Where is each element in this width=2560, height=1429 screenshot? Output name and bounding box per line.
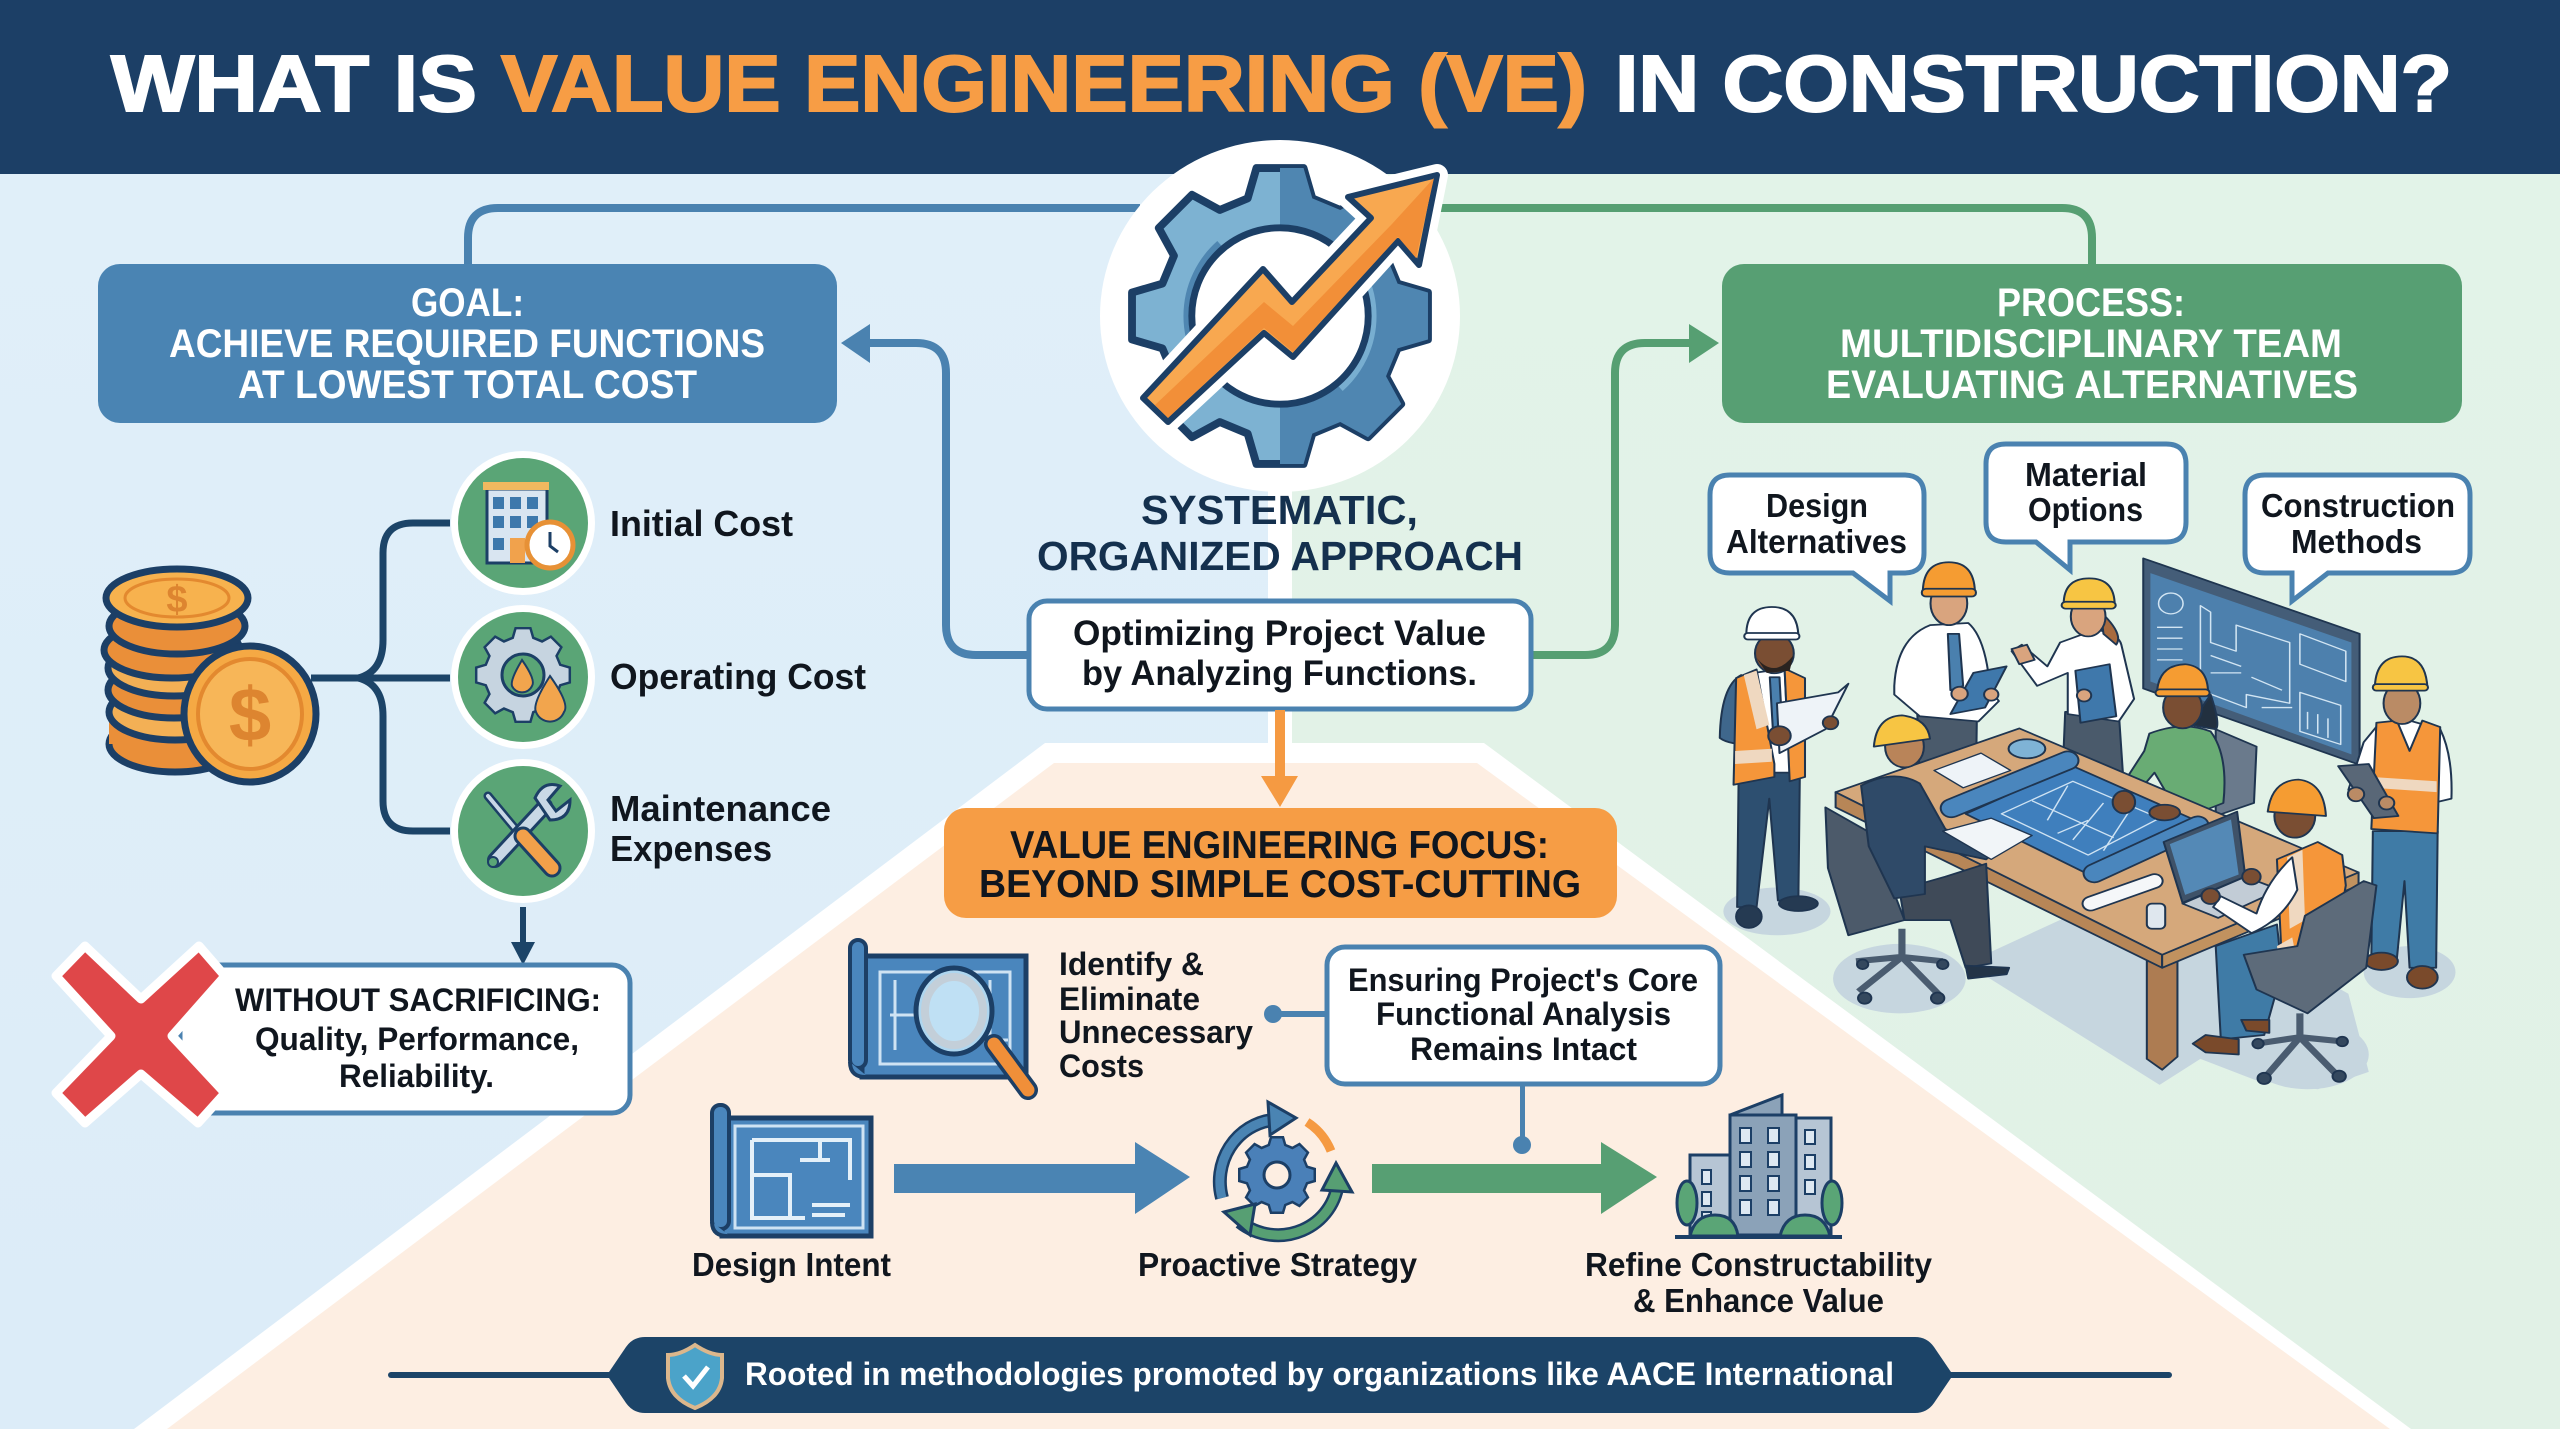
text: identify and eliminate — [1059, 946, 1253, 1084]
illustration: team meeting — [1720, 558, 2456, 1089]
process box — [1722, 264, 2462, 423]
label: refine constructability: & Enhance Value — [1633, 1282, 1884, 1319]
icon: refined building — [1675, 1095, 1842, 1237]
footer banner — [388, 1337, 2172, 1413]
icon: building with clock — [483, 482, 573, 568]
title banner: VALUE ENGINEERING (VE) — [501, 39, 1587, 128]
cost tree connectors — [311, 523, 450, 831]
background: right green panel — [1288, 174, 2560, 1429]
arrow: center to process — [1530, 324, 1719, 655]
callout: optimizing project value — [1029, 601, 1531, 709]
person: engineer with tablet — [1894, 562, 2007, 781]
label: refine constructability: Refine Constructability — [1585, 1246, 1933, 1283]
focus heading box — [944, 808, 1617, 918]
icon: red X — [56, 946, 225, 1123]
callout: core functional analysis: Remains Intact — [1410, 1031, 1637, 1067]
person: seated engineer at laptop — [2193, 780, 2376, 1084]
label: refine constructability — [1585, 1246, 1933, 1319]
hands on blueprint — [2113, 791, 2180, 820]
speech bubble: material options: Options — [2028, 491, 2143, 528]
goal box: ACHIEVE REQUIRED FUNCTIONS — [169, 322, 765, 366]
speech bubble: construction methods — [2245, 475, 2470, 601]
arrow: center to goal — [841, 324, 1030, 655]
goal box: AT LOWEST TOTAL COST — [238, 363, 697, 407]
icon: proactive strategy cycle — [1220, 1102, 1352, 1235]
title banner — [0, 0, 2560, 174]
callout: without sacrificing: WITHOUT SACRIFICING: — [235, 982, 601, 1018]
icon: coin stack — [104, 569, 316, 782]
person: woman with folder — [2012, 578, 2134, 773]
icon: gear with oil drops — [476, 628, 570, 722]
person: engineer with orange vest — [2338, 656, 2452, 989]
floor shadows — [1723, 888, 2456, 1089]
icon: blueprint with magnifier — [850, 940, 1028, 1090]
text: identify and eliminate: Costs — [1059, 1048, 1144, 1084]
white paper roll and mug — [2091, 881, 2165, 929]
text: identify and eliminate: Unnecessary — [1059, 1014, 1253, 1050]
wall screen — [2143, 558, 2360, 765]
icon: shield check — [668, 1345, 722, 1408]
laptop — [2164, 812, 2279, 918]
panel: focus trapezoid — [134, 743, 2411, 1429]
icon: coin stack: $ — [229, 673, 271, 758]
footer banner: Rooted in methodologies promoted by organizations like AACE International — [745, 1356, 1894, 1392]
goal box — [98, 264, 837, 423]
meeting table — [1836, 728, 2359, 1070]
arrow: down to without sacrificing — [511, 907, 535, 965]
connector: callout to green arrow — [1513, 1084, 1531, 1154]
callout: core functional analysis — [1327, 947, 1720, 1084]
title banner: IN CONSTRUCTION? — [1615, 39, 2452, 128]
title banner: WHAT IS — [111, 39, 477, 128]
blueprint on table — [1934, 739, 2200, 877]
text: identify and eliminate: Eliminate — [1059, 981, 1200, 1017]
connector: center to process box — [1440, 208, 2092, 264]
cost item: operating cost — [451, 605, 866, 749]
person: seated man in suit — [1825, 715, 2032, 1004]
background: left blue panel — [0, 174, 1272, 1429]
callout: without sacrificing: Reliability. — [339, 1058, 494, 1094]
person: seated woman in green — [2116, 664, 2257, 816]
speech bubble: material options: Material — [2025, 456, 2147, 493]
cost item: maintenance expenses — [451, 759, 831, 903]
callout: without sacrificing — [180, 965, 630, 1113]
heading: systematic approach: SYSTEMATIC, — [1141, 487, 1418, 533]
goal box: GOAL: — [411, 281, 524, 325]
callout: core functional analysis: Ensuring Project's Core — [1348, 962, 1698, 998]
arrow: green process arrow — [1372, 1142, 1657, 1214]
cost item: initial cost: Initial Cost — [610, 503, 793, 544]
label: design intent: Design Intent — [692, 1246, 891, 1283]
callout: core functional analysis: Functional Analysis — [1376, 996, 1671, 1032]
speech bubble: construction methods: Methods — [2291, 523, 2422, 560]
icon: wrench and screwdriver — [488, 784, 570, 868]
label: proactive strategy: Proactive Strategy — [1138, 1246, 1418, 1283]
heading: systematic approach: ORGANIZED APPROACH — [1037, 533, 1523, 579]
speech bubble: construction methods: Construction — [2261, 487, 2455, 524]
callout: without sacrificing: Quality, Performance, — [255, 1021, 579, 1057]
cost item: operating cost: Operating Cost — [610, 656, 866, 697]
focus heading box: VALUE ENGINEERING FOCUS: — [1010, 824, 1549, 867]
callout: optimizing project value: Optimizing Project Value — [1073, 614, 1486, 653]
speech bubble: design alternatives: Design — [1766, 487, 1868, 524]
callout: optimizing project value: by Analyzing Functions. — [1082, 654, 1477, 693]
process box: EVALUATING ALTERNATIVES — [1826, 363, 2358, 407]
arrow: down to focus — [1261, 710, 1298, 807]
icon: gear with rising arrow — [1100, 140, 1460, 492]
speech bubble: design alternatives: Alternatives — [1726, 523, 1907, 560]
cost item: maintenance expenses: Expenses — [610, 828, 772, 869]
process box: PROCESS: — [1997, 281, 2185, 325]
connector: center to goal box — [468, 208, 1140, 264]
connector: dot to callout — [1264, 1005, 1327, 1023]
text: identify and eliminate: Identify & — [1059, 946, 1204, 982]
arrow: blue process arrow — [894, 1142, 1190, 1214]
focus heading box: BEYOND SIMPLE COST-CUTTING — [979, 863, 1581, 906]
speech bubble: design alternatives — [1710, 475, 1924, 601]
icon: design intent blueprint — [712, 1105, 871, 1236]
process box: MULTIDISCIPLINARY TEAM — [1840, 322, 2342, 366]
speech bubble: material options — [1986, 444, 2186, 570]
cost item: initial cost — [451, 451, 793, 595]
person: engineer with white helmet — [1720, 607, 1848, 928]
icon: coin stack: $ — [166, 579, 188, 621]
heading: systematic approach — [1037, 487, 1523, 579]
cost item: maintenance expenses: Maintenance — [610, 788, 831, 829]
